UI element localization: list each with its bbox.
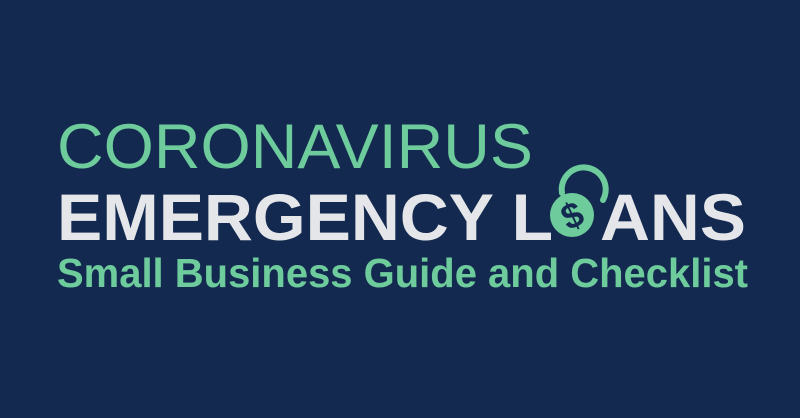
subtitle: Small Business Guide and Checklist: [57, 250, 748, 296]
title: coronavirus: CORONAVIRUS: [57, 112, 533, 182]
icon: padlock with dollar: $: [554, 193, 590, 238]
title: ans: ANS: [600, 180, 746, 254]
icon: padlock with dollar: [550, 167, 606, 238]
title: emergency l: EMERGENCY L: [57, 180, 553, 254]
